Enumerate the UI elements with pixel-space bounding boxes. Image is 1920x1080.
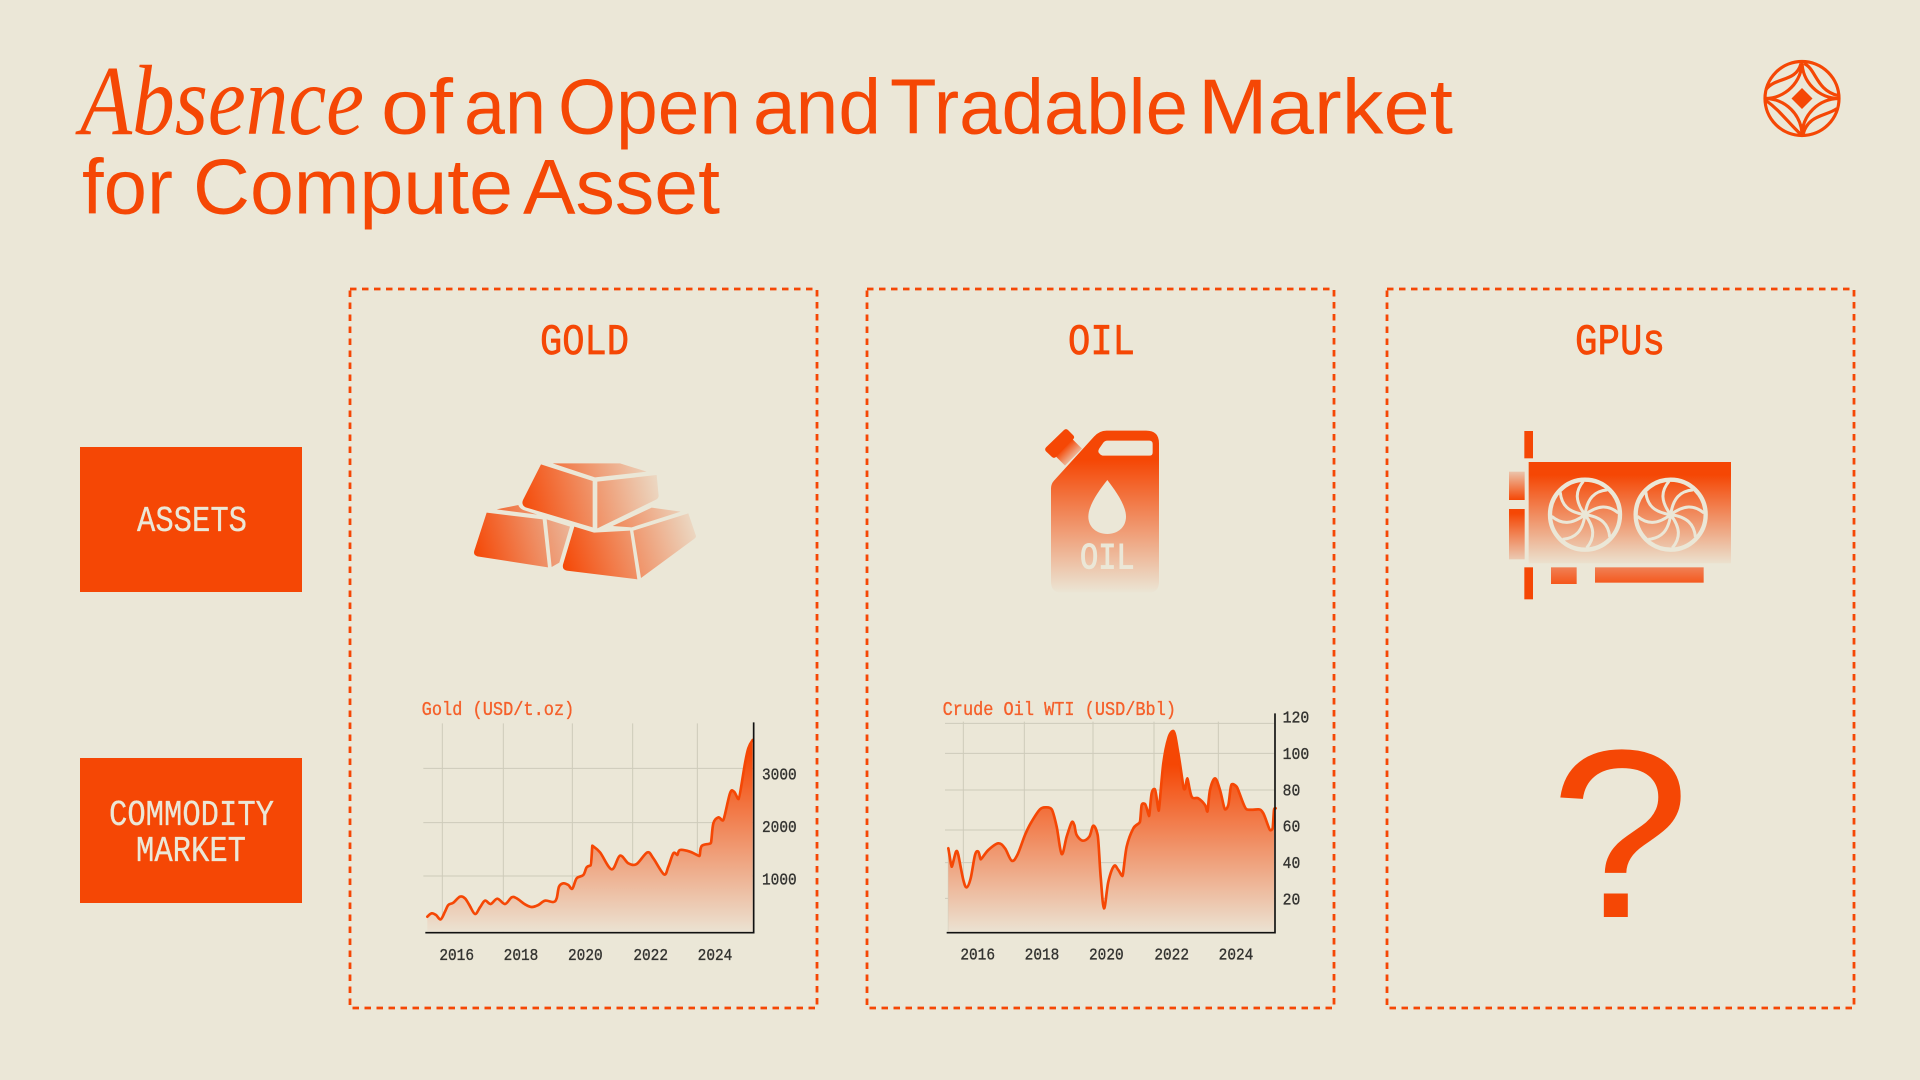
- title: for: [82, 142, 173, 230]
- chart: gold price: 2018: [504, 947, 538, 966]
- chart: crude oil price: 2020: [1089, 946, 1124, 965]
- label: commodity market: MARKET: [136, 831, 246, 872]
- icon: gold bars: [474, 463, 696, 579]
- chart: gold price: 2020: [568, 947, 603, 966]
- chart: crude oil price: 20: [1283, 891, 1300, 910]
- title: and: [753, 62, 881, 150]
- chart: crude oil price: 2022: [1154, 946, 1189, 965]
- chart: crude oil price: Crude Oil WTI (USD/Bbl): [943, 699, 1176, 721]
- panel: gpus: [1387, 289, 1854, 1008]
- label: commodity market: COMMODITY: [109, 795, 274, 836]
- icon: oil canister: [1045, 429, 1159, 593]
- chart: crude oil price: [943, 699, 1309, 965]
- question mark: no market: ?: [1550, 700, 1690, 968]
- chart: gold price: 2022: [633, 947, 668, 966]
- heading: gpus: GPUs: [1575, 318, 1665, 368]
- chart: crude oil price: 60: [1283, 819, 1300, 838]
- chart: crude oil price: 40: [1283, 855, 1300, 874]
- heading: gold: GOLD: [540, 318, 629, 368]
- icon: graphics card: [1509, 431, 1731, 599]
- chart: gold price: [422, 699, 797, 966]
- panel: gold: [350, 289, 817, 1008]
- chart: crude oil price: 120: [1283, 710, 1309, 729]
- chart: crude oil price: 2024: [1219, 946, 1253, 965]
- title: [75, 45, 1453, 230]
- title: Open: [558, 62, 741, 150]
- title: Asset: [523, 142, 720, 230]
- title: Tradable: [890, 62, 1188, 150]
- chart: gold price: 2024: [698, 947, 732, 966]
- icon: oil canister: OIL: [1080, 539, 1135, 581]
- heading: oil: OIL: [1068, 318, 1135, 368]
- title: an: [464, 62, 546, 150]
- title: Absence: [75, 45, 364, 156]
- chart: gold price: Gold (USD/t.oz): [422, 699, 574, 721]
- chart: gold price: 3000: [762, 766, 797, 785]
- chart: crude oil price: 2018: [1025, 946, 1059, 965]
- chart: gold price: 2000: [762, 819, 797, 838]
- label: assets: ASSETS: [137, 501, 247, 542]
- chart: crude oil price: 80: [1283, 783, 1300, 802]
- chart: gold price: 2016: [439, 947, 474, 966]
- label: assets: [80, 447, 302, 592]
- icon: logo emblem: [1765, 62, 1839, 136]
- chart: crude oil price: 2016: [960, 946, 995, 965]
- chart: crude oil price: 100: [1283, 746, 1309, 765]
- label: commodity market: [80, 758, 302, 903]
- title: Compute: [193, 142, 513, 230]
- chart: gold price: 1000: [762, 872, 797, 891]
- title: of: [381, 62, 453, 150]
- title: Market: [1198, 62, 1453, 150]
- panel: oil: [867, 289, 1334, 1008]
